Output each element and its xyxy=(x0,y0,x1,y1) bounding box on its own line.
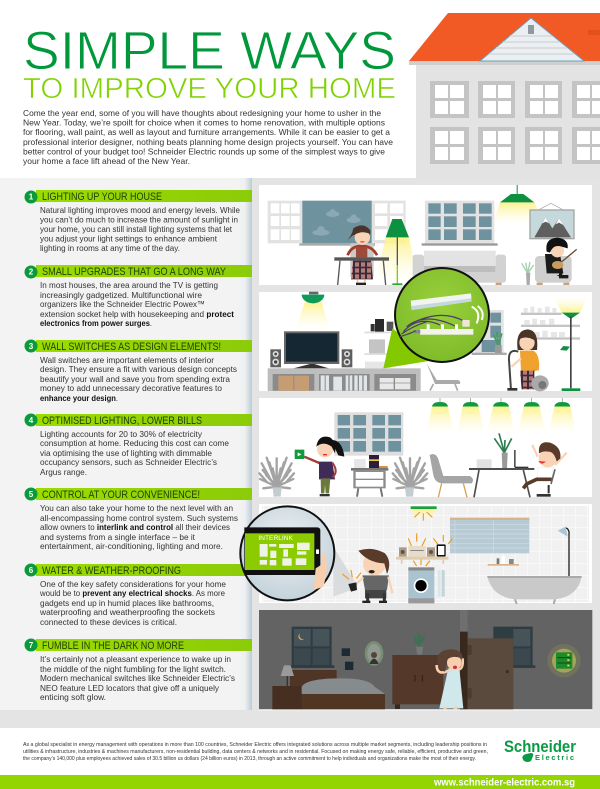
panel: scene 1 living room xyxy=(259,185,592,285)
panel: scene 3 work room xyxy=(259,398,592,497)
ceiling lamp xyxy=(492,185,544,225)
tip 2: SMALL UPGRADES THAT GO A LONG WAY xyxy=(42,266,226,278)
logo: schneider electric xyxy=(504,738,577,762)
footer: company statement xyxy=(0,728,600,775)
green wall switch xyxy=(295,450,304,459)
intro paragraph: Come the year end, some of you will have thoughts about redesigning your home to usher in the xyxy=(23,108,381,118)
tip 1: Natural lighting improves mood and energy levels. While xyxy=(40,205,240,215)
footer green bar with url xyxy=(0,775,600,789)
tip 2: organizers like the Schneider Electric Powex™ xyxy=(40,299,205,309)
footer: company statement: As a global specialist in energy management with operations in more than 100 countries, Schneider Electric offers integrated solutions across multiple market segments, including leadership positions in xyxy=(23,742,487,748)
gable xyxy=(480,18,584,61)
tip 2: 2 xyxy=(29,268,34,276)
tip 1: you can’t do much to increase the amount of sunlight in xyxy=(40,214,238,224)
tip 1: lighting in rooms at any time of the day. xyxy=(40,243,180,253)
ceiling dome light xyxy=(295,292,330,331)
window blinds xyxy=(450,518,529,553)
tip 5: 5 xyxy=(29,490,34,499)
panel: tips list xyxy=(0,178,252,710)
sofa xyxy=(413,251,506,285)
intro paragraph: for flooring, wall paint, as well as layout and furniture arrangements. While it can be easier to get a xyxy=(23,127,390,137)
tip 6: WATER & WEATHER-PROOFING xyxy=(42,565,181,577)
tip 3: beautify your wall and save you from spending extra xyxy=(40,374,230,384)
footer: company statement: the company’s 140,000 plus employees achieved sales of 30.5 billion us dollars (24 billion euros) in 2013, through an active commitment to help individuals and organizations make the most of their energy. xyxy=(23,756,476,762)
subtitle: to improve your home: TO IMPROVE YOUR HOME xyxy=(23,73,396,105)
man with guitar xyxy=(535,238,577,285)
startled woman xyxy=(437,649,463,709)
tip 1: 1 xyxy=(29,192,34,202)
tip 4: Argus range. xyxy=(40,467,87,477)
glowing wall switch xyxy=(547,644,581,677)
plant xyxy=(522,262,534,285)
tip 1: LIGHTING UP YOUR HOUSE xyxy=(42,191,162,203)
intro paragraph: your home a face lift ahead of the New Year. xyxy=(23,156,190,166)
tip 1 xyxy=(24,190,252,253)
tip 4: occupancy sensors, such as Schneider Electric’s xyxy=(40,457,217,467)
tip 3: money to add unnecessary decorative features to xyxy=(40,383,222,393)
tip 7: It’s certainly not a pleasant experience to wake up in xyxy=(40,654,231,664)
row of ceiling lights xyxy=(426,398,576,434)
tip 2: increasingly gadgetized. Multifunctional wire xyxy=(40,290,202,300)
tip 4: consumption at home. Reducing this cost can come xyxy=(40,438,229,448)
intro paragraph: professional interior designer, nothing beats planning home design projects yourself. You can have xyxy=(23,137,393,147)
tip 5: all-encompassing home control system. Such systems xyxy=(40,513,238,523)
tip 6: would be to prevent any electrical shocks. As more xyxy=(39,588,225,598)
tip 3: 3 xyxy=(29,342,34,351)
windows xyxy=(430,81,600,164)
tip 7: 7 xyxy=(29,641,34,650)
tip 4: Lighting accounts for 20 to 30% of electricity xyxy=(40,429,203,439)
left window with sky view xyxy=(268,201,406,246)
hand holding tablet xyxy=(314,553,327,590)
wall shelves with devices xyxy=(364,319,409,368)
tip 4: 4 xyxy=(29,416,34,425)
tip 2 xyxy=(24,265,252,328)
tip 2: In most houses, the area around the TV is getting xyxy=(40,280,218,290)
title: simple ways: SIMPLE WAYS xyxy=(23,21,396,81)
tip 7: NEO feature LED locators that give off a uniquely xyxy=(40,683,220,693)
ceiling light xyxy=(411,506,437,521)
tip 5: entertainment, air-conditioning, lighting and more. xyxy=(40,541,223,551)
tip 7: enticing soft glow. xyxy=(40,692,106,702)
tip 4: via optimising the use of lighting with dimmable xyxy=(40,448,212,458)
tip 5: CONTROL AT YOUR CONVENIENCE! xyxy=(42,489,200,501)
tip 6: connected to these devices is critical. xyxy=(40,617,177,627)
tip 1: your home, you can still install lighting systems that let xyxy=(40,224,233,234)
potted plants xyxy=(259,458,427,497)
footer: company statement: utilities & infrastructure, industries & machines manufacturers, non-residential building, data centers & networks and in residential. Focused on making energy safe, reliable, efficient, productive and green, xyxy=(23,749,488,755)
right window and plant xyxy=(472,310,507,355)
bathtub xyxy=(487,576,582,604)
footer green bar with url: www.schneider-electric.com.sg xyxy=(433,778,575,788)
tablet: INTERLINK xyxy=(258,535,294,542)
tip 1: you adjust your light settings to enhance ambient xyxy=(40,234,218,244)
tip 7 xyxy=(24,638,252,702)
right window xyxy=(422,201,498,246)
tip 4 xyxy=(24,414,252,477)
tip 3: WALL SWITCHES AS DESIGN ELEMENTS! xyxy=(42,341,221,353)
intro paragraph: New Year. Today, we’re spoilt for choice when it comes to home renovation, with multiple options xyxy=(23,118,385,128)
tip 7: FUMBLE IN THE DARK NO MORE xyxy=(42,640,184,652)
washing machine xyxy=(408,559,445,603)
window xyxy=(334,412,403,456)
bath shelf xyxy=(488,556,519,566)
bed and nightstand xyxy=(272,665,385,709)
wall photos xyxy=(342,641,383,670)
tip 5: allow owners to interlink and control all their devices xyxy=(40,522,230,532)
tip 5: and systems from a single interface – be it xyxy=(40,532,196,542)
tip 6: 6 xyxy=(29,566,34,575)
intro paragraph: better control of your budget too! Schneider Electric rounds up some of the simplest ways to give xyxy=(23,146,385,156)
night window xyxy=(290,627,334,668)
speakers xyxy=(270,349,352,367)
tip 3: enhance your design. xyxy=(40,393,118,403)
tip 4: OPTIMISED LIGHTING, LOWER BILLS xyxy=(42,415,202,427)
panel: scene 4 smart home bathroom xyxy=(259,504,592,604)
side table xyxy=(351,455,388,497)
tip 7: the middle of the night fumbling for the light switch. xyxy=(40,664,226,674)
tip 6: gadgets end up in humid places like bathrooms, xyxy=(40,598,214,608)
tip 6: One of the key safety considerations for your home xyxy=(40,579,226,589)
office desk xyxy=(469,433,534,497)
tablet magnifier callout xyxy=(240,506,334,600)
logo: schneider electric: Electric xyxy=(535,753,574,762)
tip 3 xyxy=(24,340,252,403)
dining chair xyxy=(427,363,460,391)
tip 2: extension socket help with housekeeping and protect xyxy=(40,309,234,319)
tip 5: You can also take your home to the next level with an xyxy=(40,503,233,513)
roof xyxy=(409,13,600,61)
tip 6 xyxy=(24,564,252,627)
woman pressing switch xyxy=(304,437,344,496)
tip 2: electronics from power surges. xyxy=(40,318,152,328)
framed mountain picture xyxy=(530,203,574,239)
logo: schneider electric: Schneider xyxy=(504,738,577,756)
tip 7: Modern mechanical switches like Schneider Electric’s xyxy=(40,673,235,683)
tall lamp xyxy=(553,296,588,391)
shelves with ornaments xyxy=(521,307,580,340)
tip 5 xyxy=(24,488,252,551)
lounge chair xyxy=(430,454,473,497)
woman at desk xyxy=(334,225,389,285)
second window and door xyxy=(460,627,535,709)
shelf with audio devices xyxy=(396,533,452,564)
media cabinet xyxy=(268,368,421,391)
tip 6: waterproofing and weatherproofing the sockets xyxy=(39,607,215,617)
panel: scene 5 dark bedroom xyxy=(259,610,592,710)
television xyxy=(284,331,339,368)
tip 3: Wall switches are important elements of interior xyxy=(40,355,214,365)
floor lamp xyxy=(375,219,418,285)
green magnifier callout xyxy=(383,268,489,368)
desk lamp xyxy=(558,527,569,576)
cheering man xyxy=(523,442,567,497)
woman with vacuum xyxy=(507,329,549,391)
cabinet with cactus xyxy=(392,633,443,709)
panel: scene 2 tv room xyxy=(259,268,592,391)
intro paragraph xyxy=(23,108,393,166)
tip 3: design. They ensure a fit with various design concepts xyxy=(40,364,237,374)
man with phone xyxy=(333,547,392,603)
